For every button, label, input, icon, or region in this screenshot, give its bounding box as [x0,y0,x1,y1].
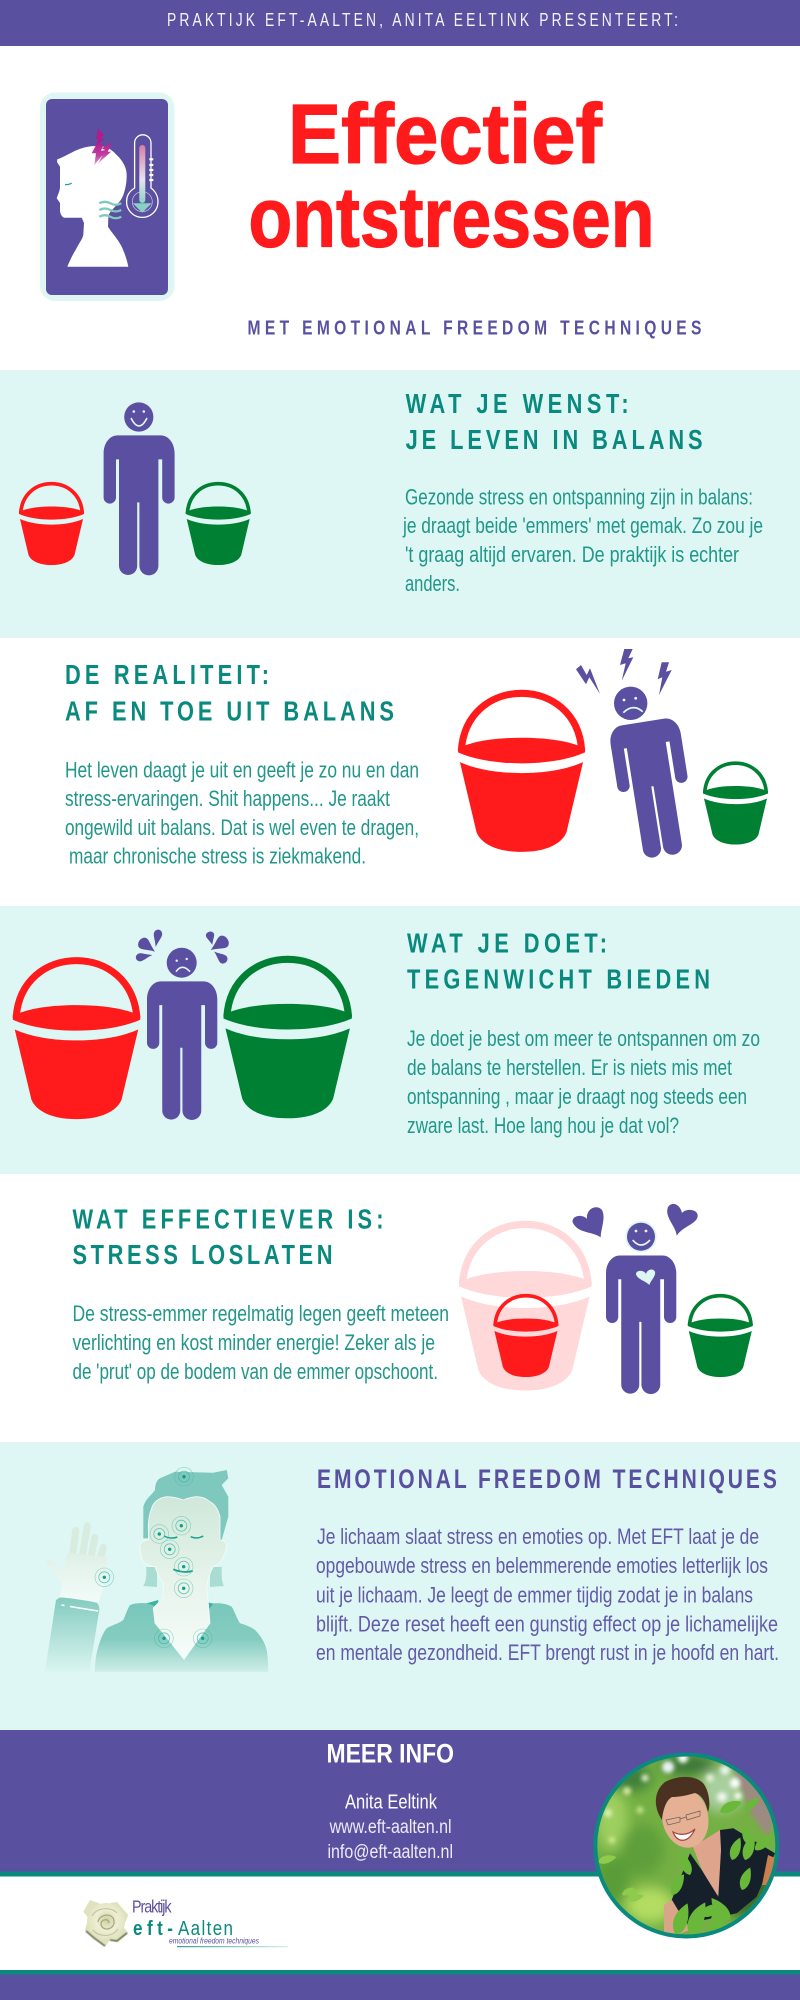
title: Effectief [288,87,603,181]
heading [407,928,710,995]
body text: verlichting en kost minder energie! Zeker als je [72,1330,435,1355]
contact details [328,1792,453,1863]
body text: ongewild uit balans. Dat is wel even te dragen, [65,815,419,840]
heading: meer info: MEER INFO [326,1738,454,1768]
body text [65,758,419,868]
top banner [0,0,800,46]
body text [72,1301,449,1384]
illustration: balanced person with two buckets [19,402,251,575]
illustration: happy person with emptied bucket [459,1204,753,1394]
body text: de 'prut' op de bodem van de emmer opschoont. [72,1359,438,1384]
panel: title header [0,46,800,370]
heading: TEGENWICHT BIEDEN [407,964,710,995]
heading: AF EN TOE UIT BALANS [65,696,394,727]
heading [65,659,394,727]
contact details: Anita Eeltink [345,1792,438,1814]
panel: wat je wenst [0,370,800,638]
heading: WAT EFFECTIEVER IS: [72,1204,383,1235]
panel: wat effectiever is [0,1174,800,1442]
body text [407,1026,760,1138]
logo: praktijk eft-aalten [83,1897,288,1947]
body text: zware last. Hoe lang hou je dat vol? [407,1113,679,1138]
photo: portrait of Anita Eeltink [590,1750,785,1940]
body text: anders. [405,571,460,596]
heading: JE LEVEN IN BALANS [406,424,703,456]
heading: STRESS LOSLATEN [72,1239,332,1271]
heading: DE REALITEIT: [65,659,269,691]
contact details: info@eft-aalten.nl [328,1842,453,1863]
logo: praktijk eft-aalten: eft- [133,1917,173,1939]
body text: stress-ervaringen. Shit happens... Je raakt [65,786,391,811]
heading: EMOTIONAL FREEDOM TECHNIQUES [317,1465,777,1495]
illustration: stressed person with heavy red bucket [458,649,768,862]
logo: praktijk eft-aalten: emotional freedom techniques [169,1935,260,1945]
panel: de realiteit [0,638,800,906]
body text [316,1524,779,1665]
body text: De stress-emmer regelmatig legen geeft meteen [72,1301,449,1326]
heading [72,1204,383,1271]
body text: Het leven daagt je uit en geeft je zo nu en dan [65,758,419,782]
icon: head with thermometer [40,92,174,301]
top banner: PRAKTIJK EFT-AALTEN, ANITA EELTINK PRESENTEERT: [167,10,678,31]
subtitle: MET EMOTIONAL FREEDOM TECHNIQUES [248,317,701,339]
logo: praktijk eft-aalten: Aalten [178,1917,233,1939]
illustration: person between two heavy buckets [13,929,352,1120]
body text: maar chronische stress is ziekmakend. [69,844,366,868]
contact details: www.eft-aalten.nl [329,1817,452,1838]
heading [406,388,703,456]
heading: WAT JE DOET: [407,928,607,959]
illustration: EFT tapping points figure [45,1467,268,1672]
panel: emotional freedom techniques [0,1442,800,1730]
panel: footer [0,1730,800,2000]
title [248,87,654,264]
body text [402,484,763,596]
heading: WAT JE WENST: [406,388,629,420]
logo: praktijk eft-aalten: Praktijk [132,1897,172,1917]
title: ontstressen [248,170,654,264]
panel: wat je doet [0,906,800,1174]
